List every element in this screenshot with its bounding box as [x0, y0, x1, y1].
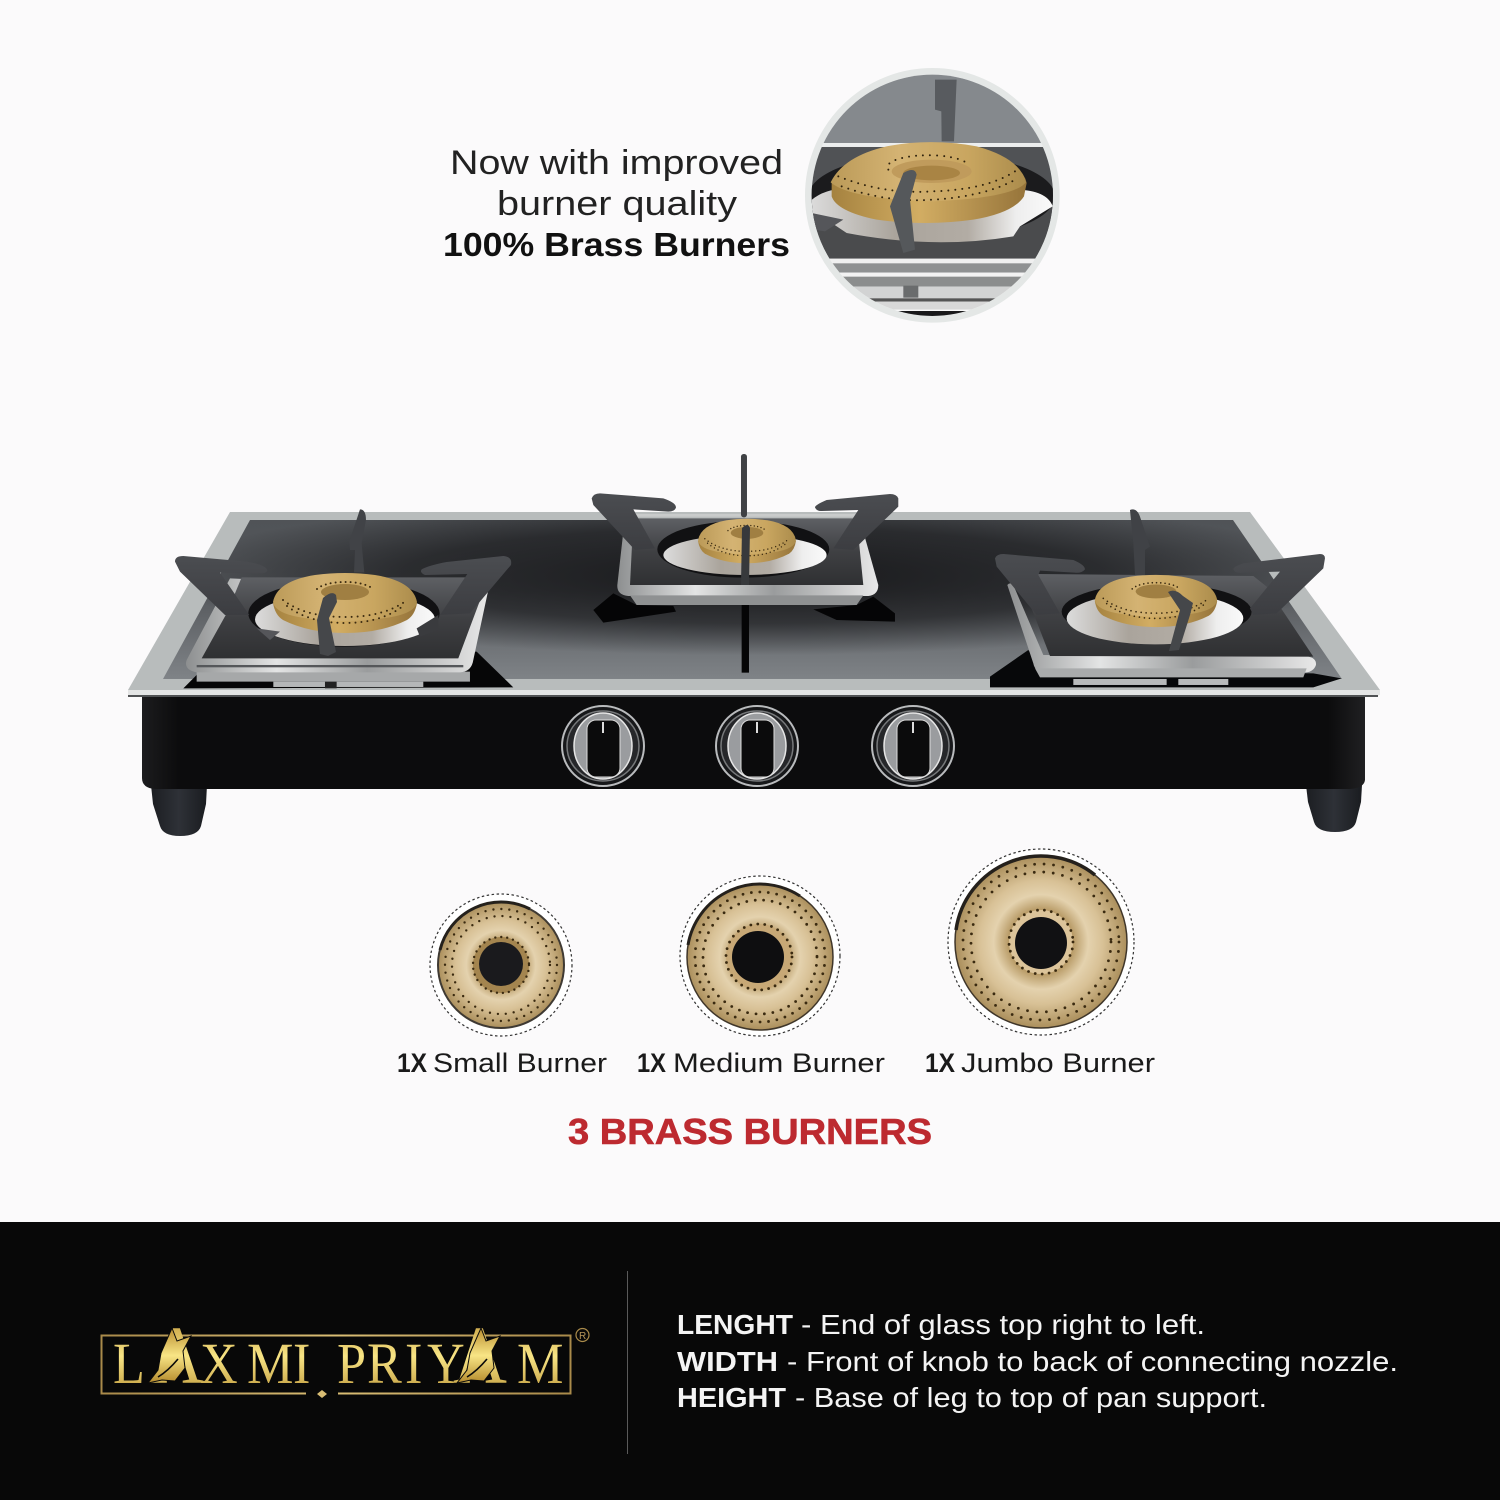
burner labels: 1X [397, 1048, 427, 1078]
logo: Laxmi Priyam: R [579, 1331, 586, 1342]
control knobs [562, 706, 954, 786]
icon: small burner top view [430, 894, 572, 1036]
logo: Laxmi Priyam: Y [427, 1331, 465, 1396]
text block: measurement definitions: HEIGHT [677, 1382, 786, 1413]
icon: jumbo burner top view [948, 849, 1134, 1035]
heading: 3 brass burners: 3 BRASS BURNERS [568, 1111, 932, 1152]
text block: improved burner quality [443, 144, 790, 263]
logo: Laxmi Priyam [102, 1310, 589, 1402]
logo: Laxmi Priyam: R [367, 1331, 402, 1396]
text block: improved burner quality: burner quality [497, 185, 737, 223]
icon: medium burner top view [680, 876, 840, 1036]
burner labels: Small Burner [433, 1048, 607, 1078]
callout: brass burner close-up circle [800, 63, 1067, 324]
logo: Laxmi Priyam: A [453, 1310, 507, 1402]
burner labels: 1X [925, 1048, 955, 1078]
logo: Laxmi Priyam: P [337, 1331, 366, 1396]
stove feet [151, 785, 1362, 836]
logo: Laxmi Priyam: M [517, 1331, 563, 1396]
burner labels: Medium Burner [673, 1048, 885, 1078]
text block: measurement definitions [677, 1309, 1398, 1413]
footer band [0, 1222, 1500, 1500]
text block: measurement definitions: - End of glass top right to left. [801, 1309, 1205, 1340]
text block: measurement definitions: LENGHT [677, 1309, 793, 1340]
logo: Laxmi Priyam: M [247, 1331, 293, 1396]
text block: measurement definitions: - Base of leg to top of pan support. [795, 1382, 1267, 1413]
burner labels: 1X [637, 1048, 666, 1078]
burner labels: Jumbo Burner [961, 1048, 1155, 1078]
center burner assembly [592, 454, 898, 673]
center burner brass [698, 519, 796, 585]
left burner brass [273, 573, 417, 656]
text block: improved burner quality: Now with improved [450, 144, 783, 182]
text block: improved burner quality: 100% Brass Burners [443, 226, 790, 263]
text block: measurement definitions: - Front of knob to back of connecting nozzle. [787, 1346, 1398, 1377]
logo: Laxmi Priyam: I [405, 1331, 422, 1396]
right burner assembly [990, 509, 1342, 687]
logo: Laxmi Priyam: X [200, 1331, 238, 1396]
logo: Laxmi Priyam: A [150, 1310, 204, 1402]
logo: Laxmi Priyam: I [293, 1331, 310, 1396]
illustration: three-burner gas stove [128, 454, 1380, 836]
glass top [128, 512, 1380, 697]
text block: measurement definitions: WIDTH [677, 1346, 778, 1377]
left burner assembly [175, 509, 513, 688]
logo: Laxmi Priyam: L [113, 1331, 145, 1396]
right burner brass [1095, 575, 1217, 651]
burner labels [397, 1048, 1155, 1078]
stove body [142, 696, 1365, 789]
